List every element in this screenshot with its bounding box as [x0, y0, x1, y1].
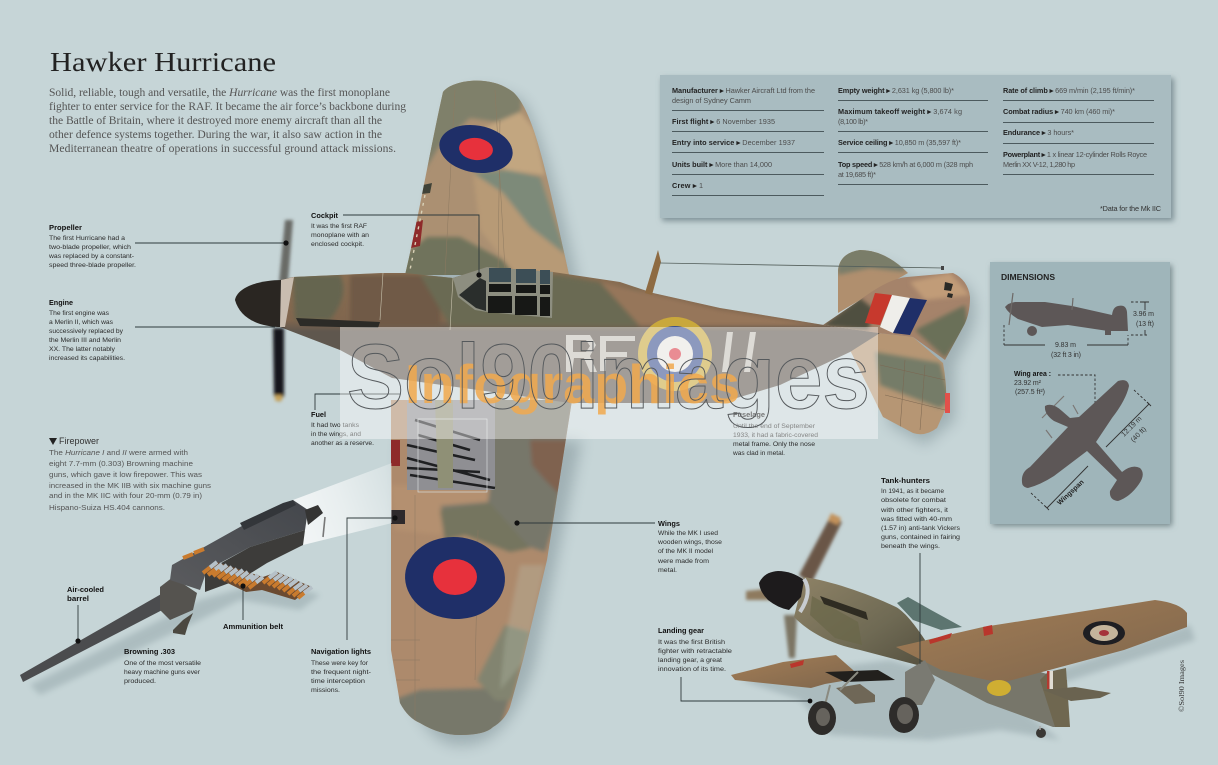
specs column 3: Combat radius ▸ 740 km (460 mi)*: [1003, 107, 1115, 116]
aerial mast and wire: [645, 250, 944, 295]
callout: propeller: The first Hurricane had a: [49, 235, 125, 242]
callout: tank-hunters: [880, 478, 961, 664]
specs column 3: Merlin XX V-12, 1,280 hp: [1003, 160, 1075, 169]
callout: fuselage: metal frame. Only the nose: [733, 441, 815, 448]
cartridges copper: [183, 549, 304, 598]
length dimension: (32 ft 3 in): [1051, 352, 1081, 359]
callout: engine: Engine: [49, 300, 73, 307]
tail fin: [823, 273, 970, 360]
propeller blades: [746, 513, 842, 658]
length dimension: 9.83 m: [1055, 342, 1076, 349]
left wing: [731, 655, 860, 688]
front housing: [160, 577, 197, 620]
watermark: Infographics: [405, 353, 740, 415]
firepower text: Hispano-Suiza HS.404 cannons.: [49, 503, 165, 512]
callout: cockpit: enclosed cockpit.: [311, 241, 364, 248]
callout: browning: One of the most versatile: [124, 660, 201, 667]
spinner ring: [800, 579, 808, 612]
callout: ammunition belt: Ammunition belt: [223, 624, 284, 631]
callout: wings: metal.: [658, 567, 677, 574]
landing gear: [808, 660, 1046, 738]
callout: wings: of the MK II model: [658, 548, 714, 555]
callout: navigation lights: Navigation lights: [311, 649, 371, 656]
span dimension: (40 ft): [1130, 426, 1148, 444]
callout: browning: [124, 649, 201, 685]
wing area label: 23.92 m²: [1014, 380, 1042, 387]
callout: propeller: was replaced by a constant-: [48, 253, 134, 260]
receiver cover: [170, 500, 308, 590]
callout: wings: [514, 520, 722, 574]
spinner: [235, 280, 282, 327]
copyright: ©Sol90 Images: [1178, 660, 1186, 712]
light beam from wing to gun: [293, 463, 392, 545]
receiver side: [205, 530, 305, 592]
callout: fuselage: [732, 412, 818, 457]
specs column 1: Entry into service ▸ December 1937: [672, 138, 795, 147]
callout: navigation lights: [311, 515, 398, 694]
specs footnote: *Data for the Mk IIC: [1100, 204, 1161, 213]
callout: navigation lights: time interception: [311, 678, 365, 685]
callout: air-cooled barrel: barrel: [67, 596, 89, 603]
side silhouette: [1005, 293, 1128, 336]
wing area label: (257.5 ft²): [1015, 389, 1045, 396]
underwing gloom: [825, 670, 895, 682]
callout: engine: XX. The latter notably: [49, 346, 116, 353]
callout: fuel: another as a reserve.: [311, 440, 374, 447]
callout: fuel: Fuel: [311, 412, 326, 419]
callout: navigation lights: the frequent night-: [311, 669, 371, 676]
panel: specifications: [660, 75, 1174, 221]
length dimension: [1004, 325, 1128, 359]
firepower text: eight 7.7-mm (0.303) Browning machine: [49, 459, 193, 468]
specs column 2: (8,100 lb)*: [838, 117, 868, 126]
firepower text: The Hurricane I and II were armed with: [49, 448, 188, 457]
callout: navigation lights: missions.: [311, 687, 340, 694]
spinner: [759, 571, 804, 610]
rear bracket: [323, 517, 325, 537]
specs column 1: [672, 86, 824, 196]
canopy: [897, 597, 962, 630]
cockpit canopy: [453, 267, 553, 318]
firepower text: Firepower: [59, 436, 99, 446]
fuselage roundel: [638, 317, 712, 391]
callout: fuel: [311, 394, 400, 447]
wing gun ports and tab: [929, 625, 993, 644]
firepower text: increased in the MK IIB with six machine guns: [49, 481, 211, 490]
intro text: Solid, reliable, tough and versatile, the Hurricane was the first monoplane: [49, 86, 390, 99]
tailplane: [1043, 687, 1111, 701]
height dimension: (13 ft): [1136, 321, 1154, 328]
callout: tank-hunters: In 1941, as it became: [881, 488, 944, 495]
specs column 2: Service ceiling ▸ 10,850 m (35,597 ft)*: [838, 138, 961, 147]
callout: wings: Wings: [658, 521, 680, 528]
elevator tab: [945, 393, 950, 413]
callout: fuselage: Until the end of September: [733, 423, 816, 430]
specs column 2: Empty weight ▸ 2,631 kg (5,800 lb)*: [838, 86, 954, 95]
callout: wings: were made from: [657, 558, 709, 565]
intro text: Mediterranean theatre of operations in successful ground attack missions.: [49, 142, 396, 155]
callout: engine: The first engine was: [49, 310, 110, 317]
callout: landing gear: fighter with retractable: [658, 648, 732, 655]
right wing roundel: [1083, 621, 1125, 645]
specs column 3: [1003, 86, 1154, 174]
height dimension: [1131, 302, 1154, 335]
aircraft: three-quarter view: [731, 513, 1195, 740]
rear fuselage: [924, 655, 1069, 727]
dimensions heading: DIMENSIONS: [1001, 273, 1056, 282]
callout: propeller: two-blade propeller, which: [49, 244, 131, 251]
callout: engine: successively replaced by: [49, 328, 124, 335]
callout: fuselage: was clad in metal.: [732, 450, 785, 457]
callout: browning: heavy machine guns ever: [124, 669, 201, 676]
upper wing: [406, 80, 569, 275]
watermark: Sol90images: [347, 326, 870, 428]
specs column 1: Manufacturer ▸ Hawker Aircraft Ltd from the: [672, 86, 815, 95]
intro text: other defence systems together. During the war, it also saw action in the: [49, 128, 382, 141]
plane shadow: [740, 625, 1195, 740]
machine gun illustration: [20, 500, 325, 695]
callout: cockpit: monoplane with an: [311, 232, 369, 239]
callout: tank-hunters: beneath the wings.: [881, 543, 940, 550]
firepower text: and in the MK IIC with four 20-mm (0.79 in): [49, 491, 202, 500]
callout: fuselage: 1933, it had a fabric-covered: [733, 432, 818, 439]
wing area label: [1014, 371, 1095, 407]
barrel: [20, 593, 168, 682]
callout: engine: a Merlin II, which was: [49, 319, 114, 326]
specs column 1: design of Sydney Camm: [672, 96, 751, 105]
cowling: [794, 577, 925, 667]
shadow: [400, 89, 976, 746]
callout: landing gear: innovation of its time.: [658, 666, 726, 673]
aircraft: top view main: [235, 70, 976, 746]
span dimension: [1031, 390, 1151, 510]
callout: cockpit: [311, 213, 482, 278]
callout: engine: the Merlin III and Merlin: [49, 337, 121, 344]
callout: air-cooled barrel: [67, 587, 104, 644]
title: Hawker Hurricane: [50, 47, 276, 77]
left wing underside: [836, 684, 875, 704]
left wing gun ports: [790, 660, 804, 668]
callout: browning: Browning .303: [124, 649, 175, 656]
callout: landing gear: It was the first British: [658, 639, 725, 646]
fuselage code letters: [566, 332, 756, 372]
callout: cockpit: Cockpit: [311, 213, 339, 220]
spinner band: [280, 277, 294, 327]
callout: wings: While the MK I used: [658, 530, 718, 537]
callout: engine: increased its capabilities.: [49, 355, 125, 362]
specs column 3: Rate of climb ▸ 669 m/min (2,195 ft/min)*: [1003, 86, 1135, 95]
span dimension: Wingspan: [1056, 479, 1086, 507]
specs column 1: First flight ▸ 6 November 1935: [672, 117, 775, 126]
rudder red: [1047, 671, 1050, 689]
firepower text: [49, 436, 211, 512]
callout: landing gear: [658, 628, 812, 703]
panel: dimensions: [990, 262, 1172, 526]
callout: ammunition belt: [223, 583, 284, 631]
specs column 2: [838, 86, 988, 184]
callout: tank-hunters: obsolete for combat: [881, 497, 946, 504]
gun bay: [407, 400, 495, 492]
fuselage: [275, 262, 885, 407]
intro text: the Battle of Britain, where it destroyed more enemy aircraft than all the: [49, 114, 382, 127]
grip: [173, 613, 193, 635]
callout: landing gear: Landing gear: [658, 628, 704, 635]
callout: fuselage: Fuselage: [733, 412, 765, 419]
intro text: [49, 86, 406, 155]
gun shadow: [30, 580, 320, 695]
specs column 2: at 19,685 ft)*: [838, 170, 876, 179]
callout: fuel: It had two tanks: [311, 422, 360, 429]
height dimension: 3.96 m: [1133, 311, 1154, 318]
tail rear surface: [838, 250, 908, 313]
callout: propeller: [48, 225, 289, 269]
callout: tank-hunters: Tank-hunters: [881, 478, 930, 485]
specs column 1: Crew ▸ 1: [672, 181, 703, 190]
specs column 3: Powerplant ▸ 1 x linear 12-cylinder Rolls Royce: [1003, 150, 1147, 159]
rear pipe: [305, 505, 323, 525]
specs column 2: Top speed ▸ 528 km/h at 6,000 m (328 mph: [838, 160, 973, 169]
fuselage roundel: [987, 680, 1011, 696]
cartridges silver: [210, 562, 312, 593]
rudder stripes: [1049, 671, 1053, 689]
cowling panel: [810, 596, 862, 645]
callout: propeller: Propeller: [49, 225, 82, 232]
callout: cockpit: It was the first RAF: [311, 223, 367, 230]
callout: engine: [49, 300, 275, 362]
wing area label: Wing area :: [1014, 371, 1051, 378]
firepower text: guns, which gave it low firepower. This was: [49, 470, 202, 479]
callout: tank-hunters: guns, contained in fairing: [881, 534, 960, 541]
callout: wings: wooden wings, those: [657, 539, 722, 546]
span dimension: 12.19 m: [1121, 415, 1143, 438]
lower tailplane: [850, 333, 946, 434]
intro text: fighter to enter service for the RAF. It became the air force’s backbone during: [49, 100, 406, 113]
top ridge: [240, 500, 296, 530]
callout: tank-hunters: was fitted with 40-mm: [880, 516, 952, 523]
callout: propeller: speed three-blade propeller.: [49, 262, 136, 269]
callout: navigation lights: These were key for: [311, 660, 369, 667]
callout: tank-hunters: with other fighters, it: [880, 507, 948, 514]
top silhouette: [1022, 380, 1143, 501]
belt backing: [205, 562, 312, 600]
callout: landing gear: landing gear, a great: [658, 657, 722, 664]
exhaust: [820, 596, 868, 620]
callout: air-cooled barrel: Air-cooled: [67, 587, 104, 594]
specs column 3: Endurance ▸ 3 hours*: [1003, 128, 1074, 137]
fin: [1040, 668, 1070, 727]
right wing: [896, 600, 1187, 683]
callout: browning: produced.: [124, 678, 156, 685]
callout: fuel: in the wings, and: [311, 431, 361, 438]
propeller: [273, 220, 293, 402]
lower wing: [391, 400, 572, 735]
specs column 1: Units built ▸ More than 14,000: [672, 160, 772, 169]
specs column 2: Maximum takeoff weight ▸ 3,674 kg: [838, 107, 962, 116]
callout: tank-hunters: (1.57 in) anti-tank Vickers: [881, 525, 961, 532]
